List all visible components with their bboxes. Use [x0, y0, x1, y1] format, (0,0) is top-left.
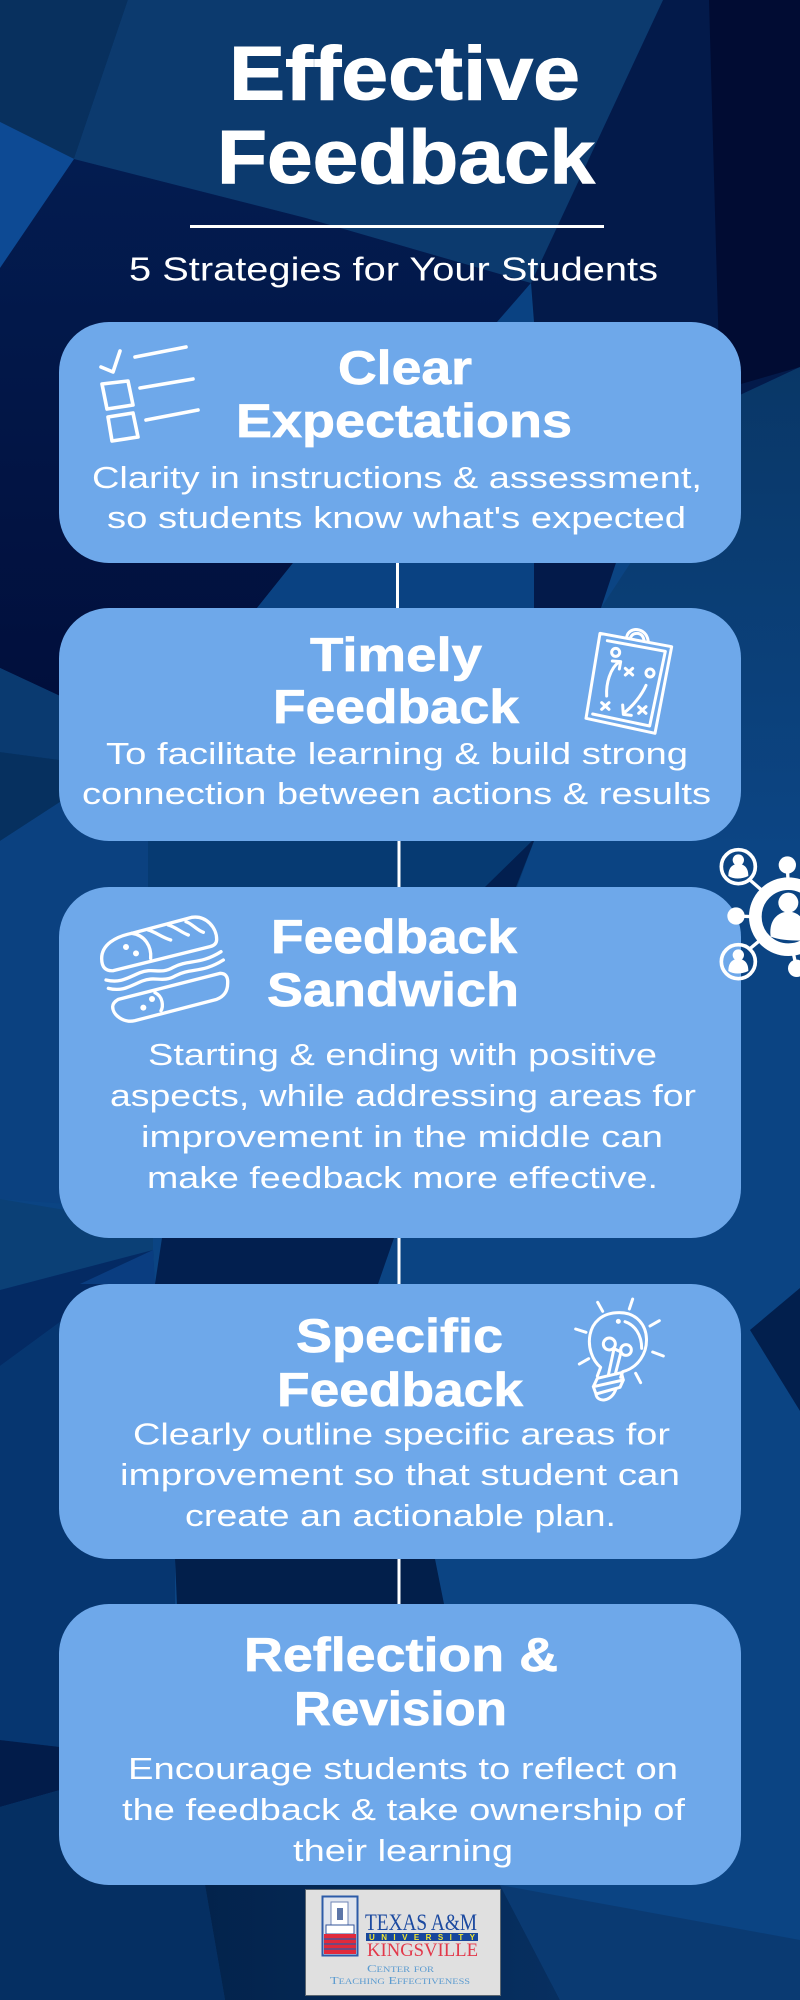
body text: so students know what's expected	[107, 500, 686, 535]
logo: Texas A&M University Kingsville: TEXAS A&M	[365, 1910, 477, 1935]
body text: make feedback more effective.	[147, 1160, 658, 1195]
body text: Encourage students to reflect on	[128, 1751, 678, 1786]
logo seal	[322, 1896, 358, 1956]
body text	[120, 1416, 680, 1533]
heading: Timely	[310, 628, 482, 681]
heading: Reflection &	[244, 1628, 558, 1681]
panel: reflection and revision	[59, 1604, 741, 1885]
heading: Sandwich	[267, 963, 519, 1016]
body text	[92, 460, 702, 535]
body text: their learning	[293, 1833, 513, 1868]
heading	[277, 1309, 524, 1416]
title rule	[190, 225, 604, 228]
icon: people network	[721, 850, 800, 979]
title	[217, 32, 596, 200]
heading	[273, 628, 520, 733]
panel: clear expectations	[59, 322, 741, 563]
body text: connection between actions & results	[82, 776, 711, 811]
body text: aspects, while addressing areas for	[110, 1078, 696, 1113]
panel: feedback sandwich	[59, 887, 741, 1238]
body text: Clarity in instructions & assessment,	[92, 460, 702, 495]
heading	[236, 341, 572, 447]
title: Feedback	[217, 115, 596, 200]
logo: Texas A&M University Kingsville: KINGSVILLE	[367, 1940, 478, 1961]
body text	[82, 736, 711, 811]
body text: the feedback & take ownership of	[122, 1792, 685, 1827]
heading: Feedback	[273, 680, 520, 733]
panel: specific feedback	[59, 1284, 741, 1559]
body text	[122, 1751, 685, 1868]
heading: Revision	[294, 1682, 507, 1735]
title: Effective	[229, 32, 580, 116]
connectors	[396, 563, 400, 1604]
body text: Clearly outline specific areas for	[133, 1416, 670, 1452]
heading: Feedback	[277, 1363, 524, 1416]
icon: clipboard playbook	[586, 630, 672, 733]
body text: Starting & ending with positive	[148, 1037, 657, 1072]
body text: create an actionable plan.	[185, 1498, 616, 1533]
panel: timely feedback	[59, 608, 741, 841]
logo: Texas A&M University Kingsville: Teaching Effectiveness	[330, 1975, 470, 1987]
heading: Specific	[296, 1309, 503, 1362]
university bar	[366, 1933, 478, 1941]
heading	[267, 910, 519, 1016]
logo: Texas A&M University Kingsville: UNIVERSITY	[369, 1933, 476, 1942]
heading: Expectations	[236, 394, 572, 447]
icon: sandwich	[102, 917, 228, 1021]
logo: Texas A&M University Kingsville: Center for	[367, 1963, 435, 1975]
body text: To facilitate learning & build strong	[106, 736, 688, 771]
body text: improvement so that student can	[120, 1457, 680, 1492]
body text	[110, 1037, 696, 1195]
heading: Feedback	[271, 910, 518, 963]
icon: checklist	[101, 347, 198, 441]
icon: light bulb	[576, 1299, 663, 1400]
heading	[244, 1628, 558, 1735]
heading: Clear	[338, 341, 472, 394]
subtitle: 5 Strategies for Your Students	[129, 250, 658, 288]
logo: Texas A&M University Kingsville	[306, 1890, 500, 1996]
body text: improvement in the middle can	[141, 1119, 663, 1154]
